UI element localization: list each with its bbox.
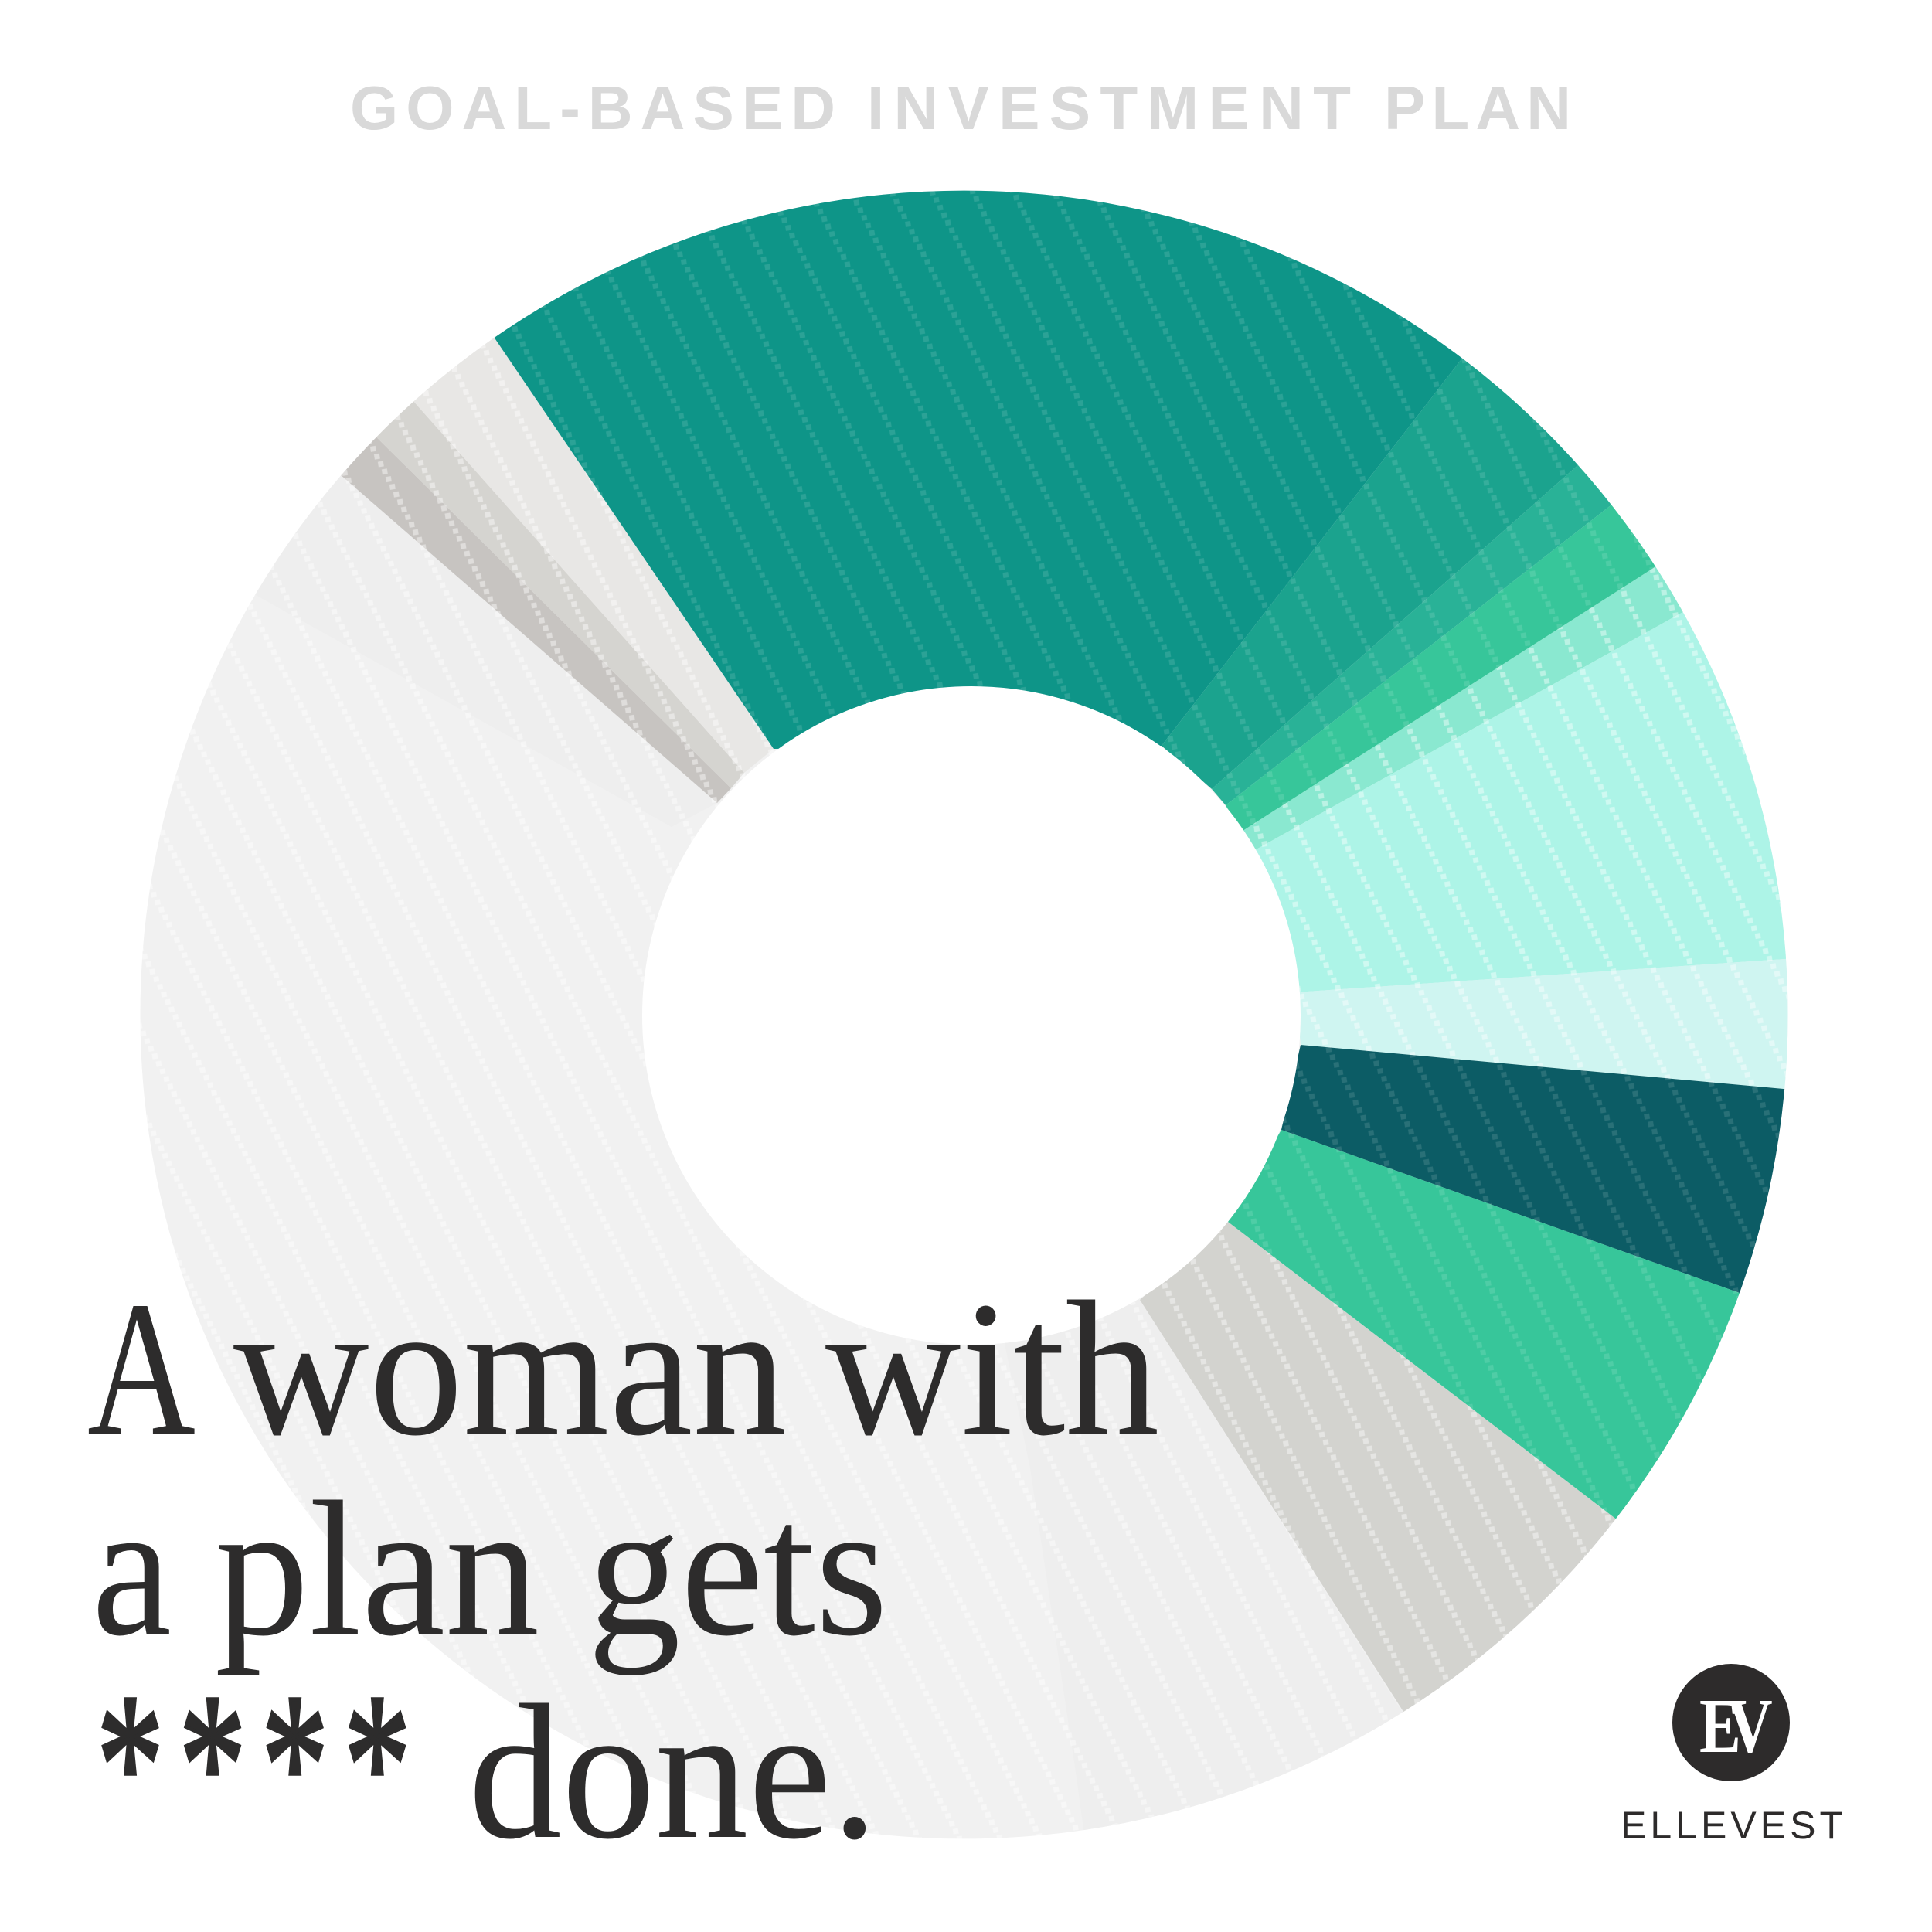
segment: aqua <box>1256 612 1786 992</box>
segment: pale green sliver <box>1243 566 1683 850</box>
headline line 3 word: done. <box>468 1665 878 1879</box>
headline <box>87 1262 1159 1879</box>
title <box>350 73 1571 142</box>
dotted stripes over lower teal segments <box>1243 1047 1779 1512</box>
segment: green sliver <box>1226 505 1655 830</box>
headline line 1 <box>87 1262 1159 1476</box>
logo <box>1621 1664 1843 1847</box>
headline line 2: gets <box>587 1462 888 1676</box>
segment: pale aqua <box>1300 959 1788 1089</box>
segment: large light grey <box>141 595 1403 1839</box>
headline line 2: a <box>92 1462 172 1676</box>
segment: main teal <box>495 190 1462 749</box>
segment: mid teal <box>1162 359 1578 789</box>
dotted stripes over upper teal segments <box>512 190 1655 824</box>
logo monogram: EV <box>1699 1683 1772 1769</box>
logo circle <box>1672 1664 1790 1781</box>
title word 3: PLAN <box>1384 73 1571 142</box>
segment: light teal <box>1212 465 1612 805</box>
headline line 3 asterisks: **** <box>97 1651 426 1877</box>
headline line 1: A <box>87 1262 196 1476</box>
segment: green <box>1228 1130 1740 1519</box>
segment: pale grey sliver <box>414 338 773 773</box>
donut chart <box>141 190 1788 1839</box>
segment: mid grey sliver <box>376 402 744 788</box>
headline line 2 <box>92 1462 888 1676</box>
headline line 2: plan <box>215 1462 539 1676</box>
segment: darkest grey sliver <box>342 437 731 803</box>
segment: subtle lower grey band <box>997 1300 1468 1932</box>
headline line 1: woman <box>233 1262 787 1476</box>
dotted stripes over light segments <box>342 345 1787 1704</box>
segment: dark teal <box>1281 1045 1785 1293</box>
title word 1: GOAL-BASED <box>350 73 835 142</box>
segment: subtle upper grey band <box>116 443 717 827</box>
headline line 1: with <box>825 1262 1159 1476</box>
title word 2: INVESTMENT <box>867 73 1351 142</box>
segment: warm grey <box>1140 1222 1616 1712</box>
logo wordmark: ELLEVEST <box>1621 1804 1843 1847</box>
